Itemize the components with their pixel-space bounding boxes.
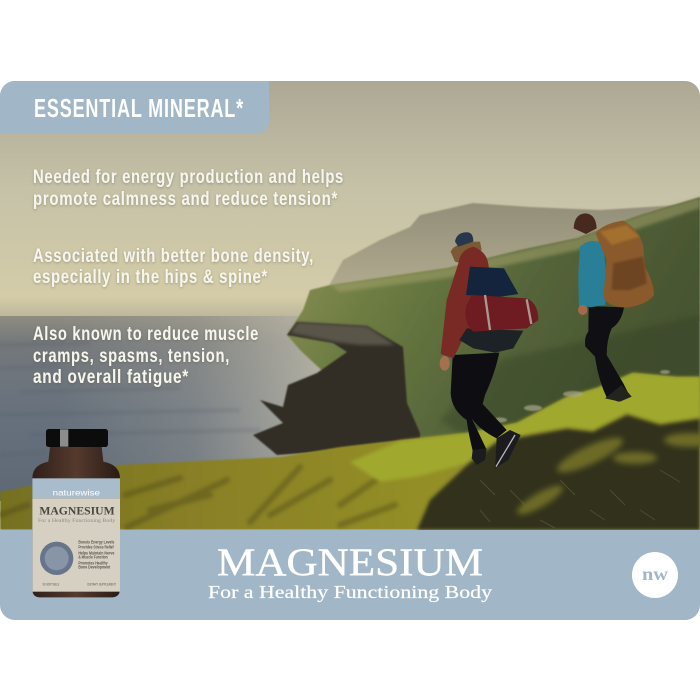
text block: bone density: especially in the hips & spine*: [33, 266, 268, 288]
shoes: [472, 430, 521, 468]
navy pack: [466, 267, 518, 297]
dark rocky shoreline: [253, 322, 420, 455]
green headland: [287, 197, 700, 450]
grass streaks: [0, 467, 395, 527]
logo: nw badge: [632, 552, 678, 598]
pack shadow: [612, 257, 647, 290]
dark lower slope: [417, 415, 700, 530]
foreground grass: [0, 373, 700, 530]
jacket: [578, 241, 607, 313]
text block: muscle: [33, 323, 259, 388]
text block: energy: promote calmness and reduce tension*: [33, 188, 338, 210]
red jacket: [441, 247, 493, 358]
infographic: [0, 81, 700, 620]
panel: landscape photo and footer: [0, 81, 700, 620]
mineral circle: [40, 542, 73, 575]
bottom label line: DIETARY SUPPLEMENT: [87, 582, 116, 586]
benefit lines: Boosts Energy Levels: [78, 540, 115, 545]
footer subtitle: For a Healthy Functioning Body: [208, 582, 492, 602]
grass blades: [480, 470, 680, 528]
text block: bone density: [33, 245, 314, 288]
lower pack: [459, 328, 523, 353]
wildflower seed heads: [493, 370, 670, 422]
bright sunlit ridge: [350, 373, 700, 482]
label blue band: [32, 478, 120, 498]
sunlit ridge: [330, 197, 700, 292]
text block: energy: Needed for energy production and helps: [33, 166, 344, 188]
benefit lines: Helps Maintain Nerve: [78, 550, 115, 555]
pants: [451, 353, 507, 453]
photo: coastal landscape: [0, 81, 700, 530]
footer band: [0, 530, 700, 620]
pack highlight: [600, 225, 639, 245]
hikers: [440, 213, 654, 468]
grey rock band: [290, 322, 395, 345]
red duffel: [465, 295, 538, 332]
cap: [455, 232, 473, 247]
benefit lines: Bone Development: [78, 565, 111, 570]
text block: muscle: and overall fatigue*: [33, 366, 189, 388]
text block: muscle: Also known to reduce muscle: [33, 323, 259, 345]
brand name: naturewise: [53, 488, 101, 497]
hat: [574, 213, 597, 234]
label cream area: [32, 498, 120, 592]
tan backpack: [596, 221, 654, 308]
pants: [585, 306, 630, 402]
bottle body: [32, 447, 120, 597]
text block: muscle: cramps, spasms, tension,: [33, 345, 230, 367]
footer title: MAGNESIUM: [217, 541, 483, 584]
distant hills: [330, 202, 700, 286]
right hiker: [574, 213, 654, 402]
shoe stripe: [496, 435, 515, 467]
benefit lines: Provides Stress Relief: [78, 544, 114, 549]
benefit lines: [78, 540, 115, 570]
hand: [578, 305, 587, 315]
cap highlight: [60, 429, 68, 447]
sky: [0, 81, 700, 321]
text block: bone density: Associated with better bone density,: [33, 245, 314, 267]
text block: energy: [33, 166, 344, 210]
hair: [451, 242, 482, 264]
logo: nw badge: nw: [642, 564, 668, 584]
product bottle: [32, 429, 120, 597]
shoe: [605, 385, 632, 402]
left hiker: [440, 232, 538, 468]
cap: [46, 429, 108, 447]
benefit lines: & Muscle Function: [78, 555, 108, 560]
bottom label line: [43, 582, 116, 586]
heading: essential mineral: ESSENTIAL MINERAL*: [34, 93, 244, 123]
sunlit patches: [514, 432, 700, 519]
hand: [440, 356, 450, 371]
valley shadow: [440, 315, 700, 440]
product tagline: For a Healthy Functioning Body: [38, 518, 116, 524]
product name: MAGNESIUM: [39, 503, 115, 517]
benefit lines: Promotes Healthy: [78, 560, 108, 565]
sea: [0, 316, 322, 501]
heading tab: [0, 81, 269, 133]
duffel straps: [485, 295, 531, 330]
bottom label line: 90 SOFTGELS: [43, 582, 60, 586]
